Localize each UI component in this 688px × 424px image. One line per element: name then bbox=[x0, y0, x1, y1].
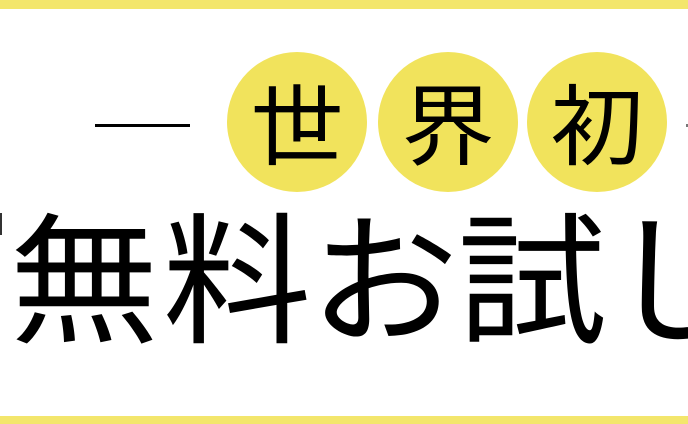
headline: 無 bbox=[9, 204, 159, 363]
badge: 初: 初 bbox=[550, 78, 644, 177]
right dash bbox=[686, 124, 688, 127]
bottom border bar bbox=[0, 416, 688, 424]
badge: 世: 世 bbox=[250, 78, 344, 177]
headline: 試 bbox=[457, 204, 607, 363]
quote fragment bbox=[0, 213, 2, 235]
badge: 初 bbox=[527, 52, 667, 192]
left dash bbox=[95, 124, 190, 127]
top border bar bbox=[0, 0, 688, 9]
badge: 界 bbox=[378, 52, 518, 192]
headline: お bbox=[309, 204, 459, 363]
badge: 世 bbox=[227, 52, 367, 192]
badge: 界: 界 bbox=[401, 78, 495, 177]
headline: 料 bbox=[162, 204, 312, 363]
